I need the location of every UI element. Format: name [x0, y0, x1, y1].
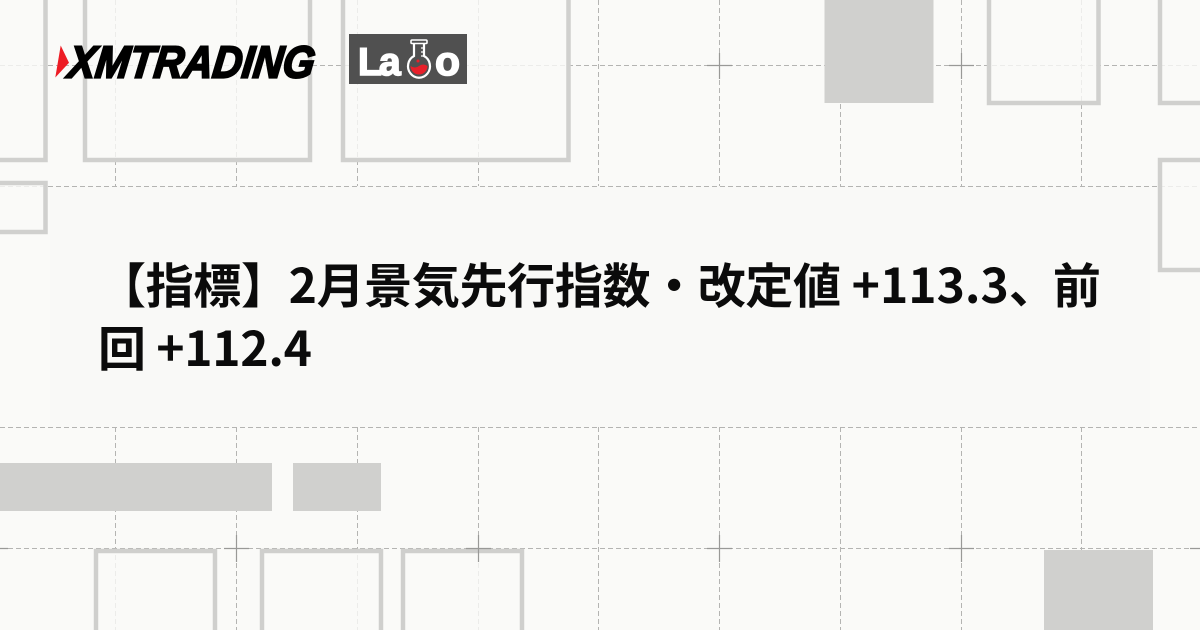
panel: title backing	[50, 186, 1150, 427]
logo: Lab: a	[379, 41, 401, 84]
title: 【指標】2月景気先行指数・改定値 +113.3、前	[98, 247, 1101, 317]
outlined candles top left	[0, 0, 568, 232]
logo: Lab	[349, 34, 467, 84]
logo: Lab: L	[358, 41, 382, 84]
logo: Lab: o	[435, 38, 460, 84]
title: 回 +112.4	[98, 310, 312, 380]
logo: XMTRADING: XMTRADING	[63, 37, 318, 87]
outlined candles bottom	[96, 551, 522, 630]
icon: flask	[408, 40, 430, 78]
outlined candles top right	[989, 0, 1200, 270]
title	[98, 247, 1101, 380]
